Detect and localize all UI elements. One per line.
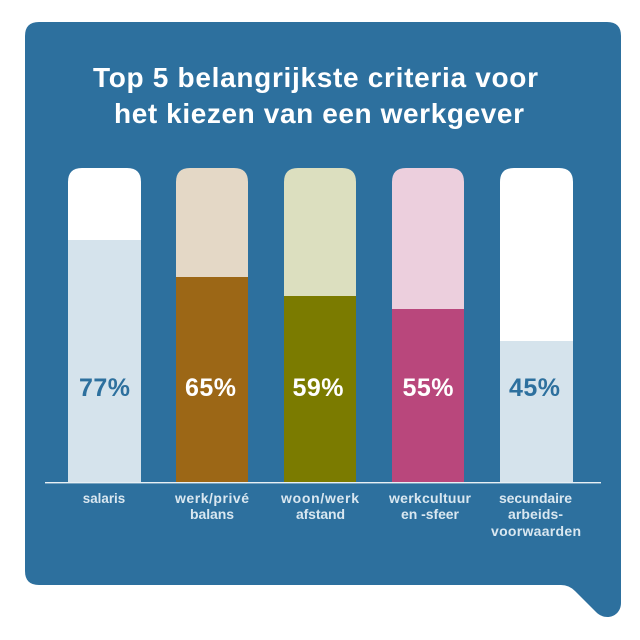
label: secundaire arbeidsvoorwaarden: voorwaarden (491, 523, 581, 539)
bar: woon/werk afstand 59% (284, 168, 356, 482)
label: secundaire arbeidsvoorwaarden: arbeids- (508, 506, 563, 522)
title (93, 62, 538, 129)
label: secundaire arbeidsvoorwaarden (491, 490, 581, 539)
label: salaris: salaris (83, 491, 125, 506)
bar: woon/werk afstand 59%: 59% (292, 374, 344, 402)
label: woon/werk afstand: afstand (296, 506, 345, 522)
label: werkcultuur en -sfeer: en -sfeer (401, 506, 460, 522)
bar: werk/privé balans 65% (176, 168, 248, 482)
bar: werkcultuur en -sfeer 55% (392, 168, 464, 482)
label: secundaire arbeidsvoorwaarden: secundaire (499, 490, 572, 506)
bar: secundaire arbeidsvoorwaarden 45% (500, 168, 573, 482)
bar: secundaire arbeidsvoorwaarden 45%: 45% (509, 374, 560, 402)
bar: werkcultuur en -sfeer 55%: 55% (402, 374, 454, 402)
bar: salaris 77%: 77% (79, 374, 130, 402)
label: woon/werk afstand (280, 490, 359, 522)
label: werkcultuur en -sfeer (388, 490, 472, 522)
label: werk/privé balans: balans (190, 506, 234, 522)
label: werk/privé balans (174, 490, 249, 522)
label: woon/werk afstand: woon/werk (280, 490, 359, 506)
bar chart (45, 168, 601, 483)
label: werkcultuur en -sfeer: werkcultuur (388, 490, 472, 506)
label: werk/privé balans: werk/privé (174, 490, 249, 506)
bar: salaris 77% (68, 168, 141, 482)
bar: werk/privé balans 65%: 65% (185, 374, 236, 402)
title: het kiezen van een werkgever (114, 98, 524, 129)
title: Top 5 belangrijkste criteria voor (93, 62, 538, 93)
